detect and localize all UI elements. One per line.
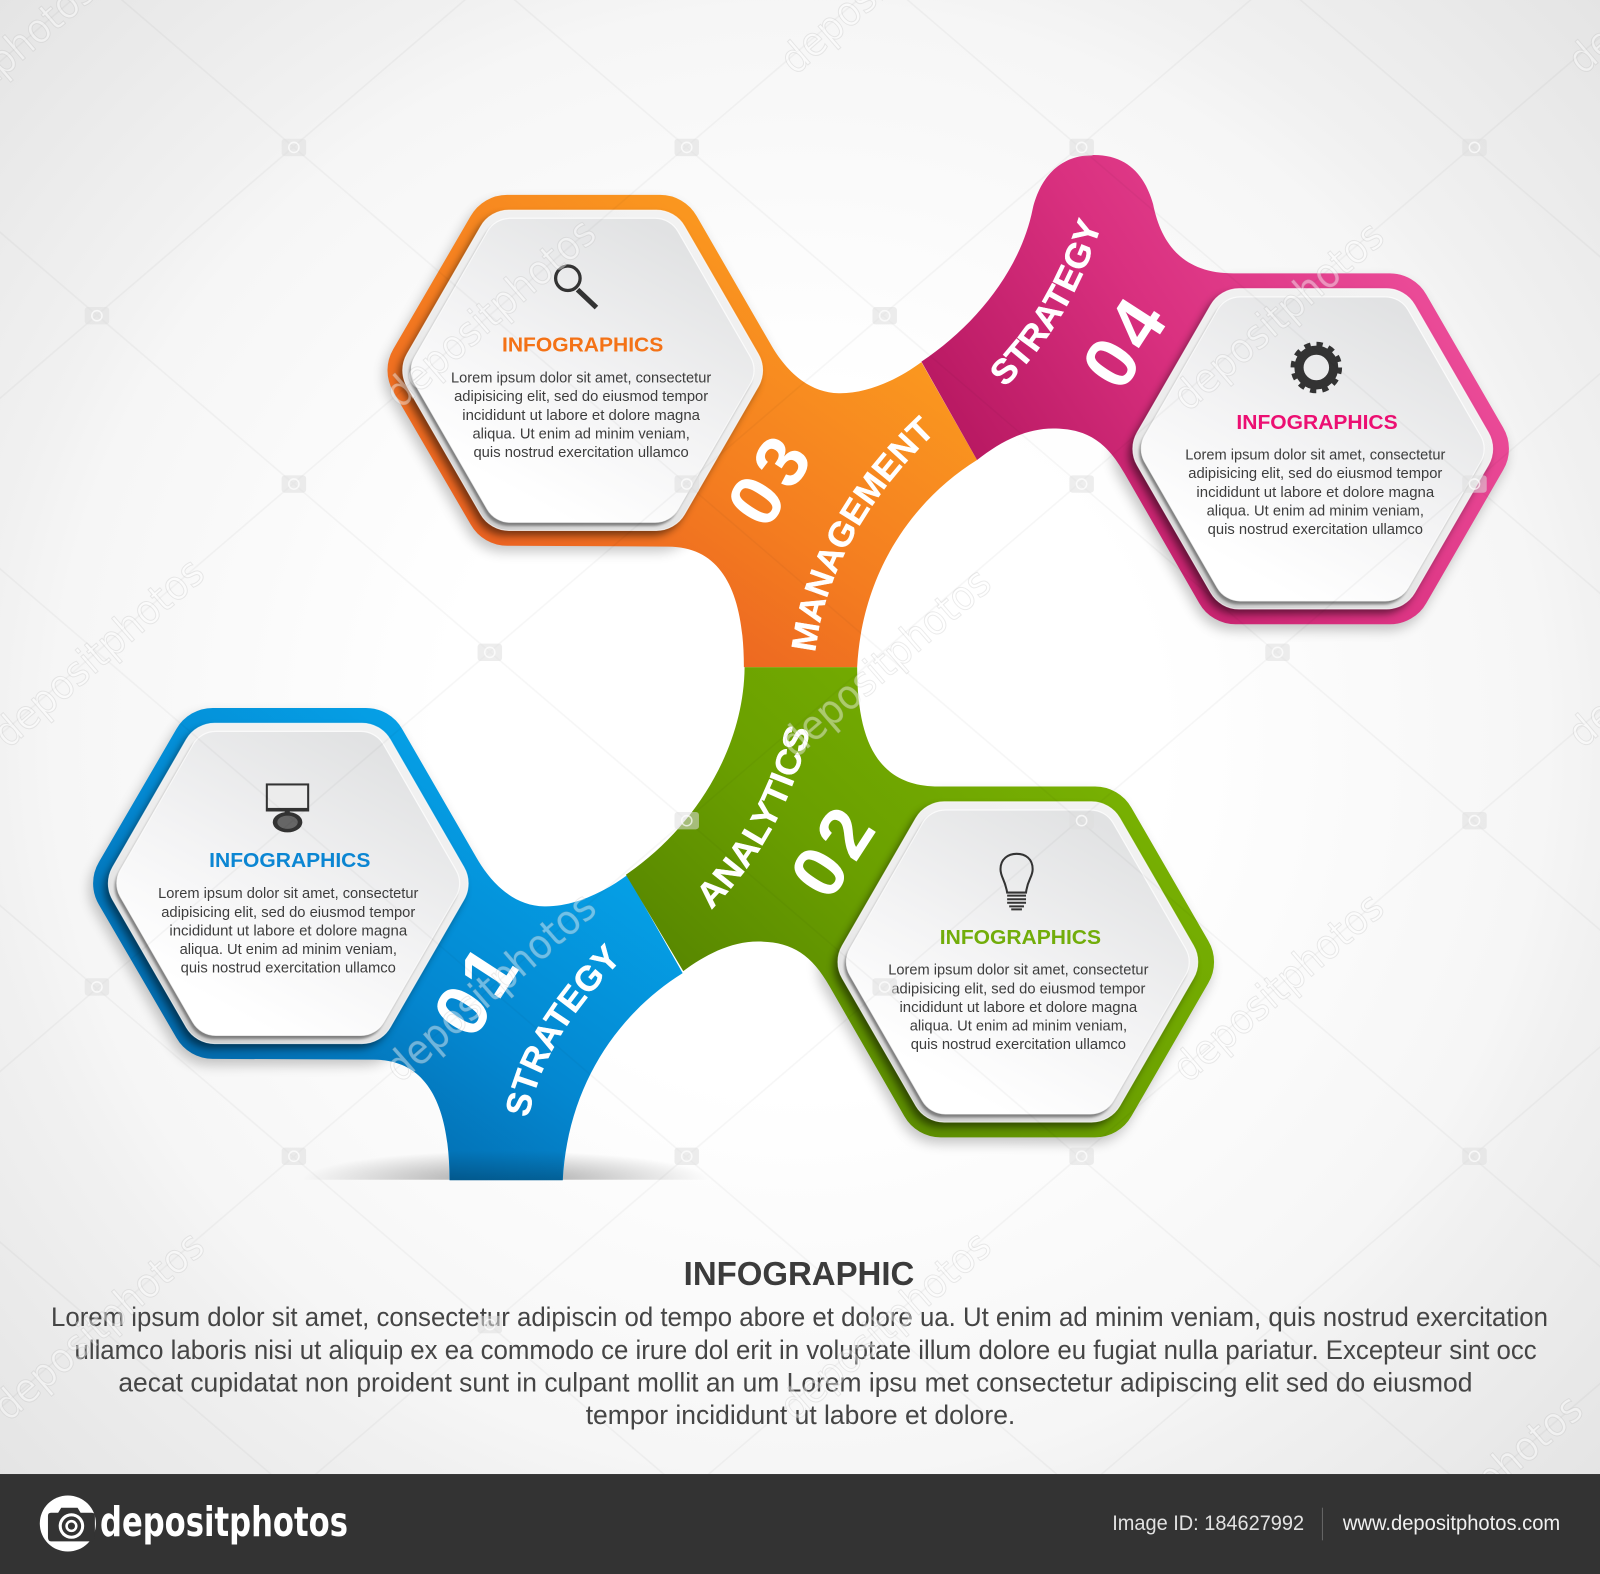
watermarks: depositphotos — [1163, 211, 1393, 420]
blue ribbon — [93, 708, 683, 1180]
label: strategy: STRATEGY — [506, 942, 616, 1116]
watermarks: depositphotos — [375, 208, 605, 417]
hexagon card — [834, 802, 1198, 1127]
label: analytics: ANALYTICS — [700, 726, 808, 910]
logo: wordmark: depositphotos — [100, 1498, 348, 1546]
panel: step 01 strategy — [84, 708, 683, 1180]
number 02: 02 — [774, 788, 894, 912]
hexagon card — [104, 723, 468, 1049]
icon: light bulb — [1001, 854, 1033, 909]
icon: gear — [1293, 345, 1339, 390]
heading: infographics: INFOGRAPHICS — [209, 850, 370, 872]
watermarks: depositphotos — [770, 1221, 1000, 1430]
pink ribbon — [921, 155, 1509, 624]
heading: infographics: INFOGRAPHICS — [1236, 412, 1398, 434]
green ribbon — [626, 667, 1214, 1137]
footer bar — [0, 1474, 1600, 1574]
main text block: aecat cupidatat non proident sunt in culpant mollit an um Lorem ipsu met consectetur adipiscing elit sed do eiusmod — [118, 1367, 1472, 1397]
hexagon card — [399, 210, 763, 536]
number 03: 03 — [711, 417, 831, 540]
body text — [888, 963, 1149, 1053]
main text block: ullamco laboris nisi ut aliquip ex ea commodo ce irure dol erit in voluptate illum dolore eu fugiat nulla pariatur. Excepteur sint occ — [74, 1335, 1537, 1365]
heading: infographic: INFOGRAPHIC — [684, 1256, 914, 1293]
icon: magnifier — [556, 266, 596, 308]
panel: step 03 management — [378, 194, 977, 668]
label: management: MANAGEMENT — [792, 414, 930, 651]
label: strategy: STRATEGY — [992, 216, 1099, 384]
watermarks: depositphotos — [1163, 882, 1393, 1091]
main text block: tempor incididunt ut labore et dolore. — [586, 1400, 1015, 1430]
heading: infographics: INFOGRAPHICS — [940, 927, 1101, 949]
website: www.depositphotos.com — [1342, 1512, 1560, 1535]
number 04: 04 — [1066, 279, 1186, 403]
main text block: Lorem ipsum dolor sit amet, consectetur adipiscin od tempo abore et dolore ua. Ut enim ad minim veniam, quis nostrud exercitation — [51, 1302, 1548, 1332]
main text block — [51, 1302, 1548, 1430]
hexagon card — [1129, 289, 1493, 614]
body text — [451, 371, 711, 461]
watermarks: depositphotos — [375, 882, 605, 1091]
icon: monitor — [266, 784, 309, 832]
logo: camera badge — [40, 1495, 96, 1552]
heading: infographics: INFOGRAPHICS — [502, 335, 663, 357]
number 01: 01 — [417, 927, 537, 1050]
body text — [1185, 448, 1446, 538]
ground shadow — [302, 1122, 710, 1180]
body text — [158, 886, 418, 977]
image id: Image ID: 184627992 — [1112, 1512, 1304, 1535]
orange ribbon — [387, 195, 977, 667]
panel: step 04 strategy — [922, 155, 1512, 636]
watermarks: depositphotos — [770, 558, 1000, 767]
panel: step 02 analytics — [626, 667, 1217, 1150]
